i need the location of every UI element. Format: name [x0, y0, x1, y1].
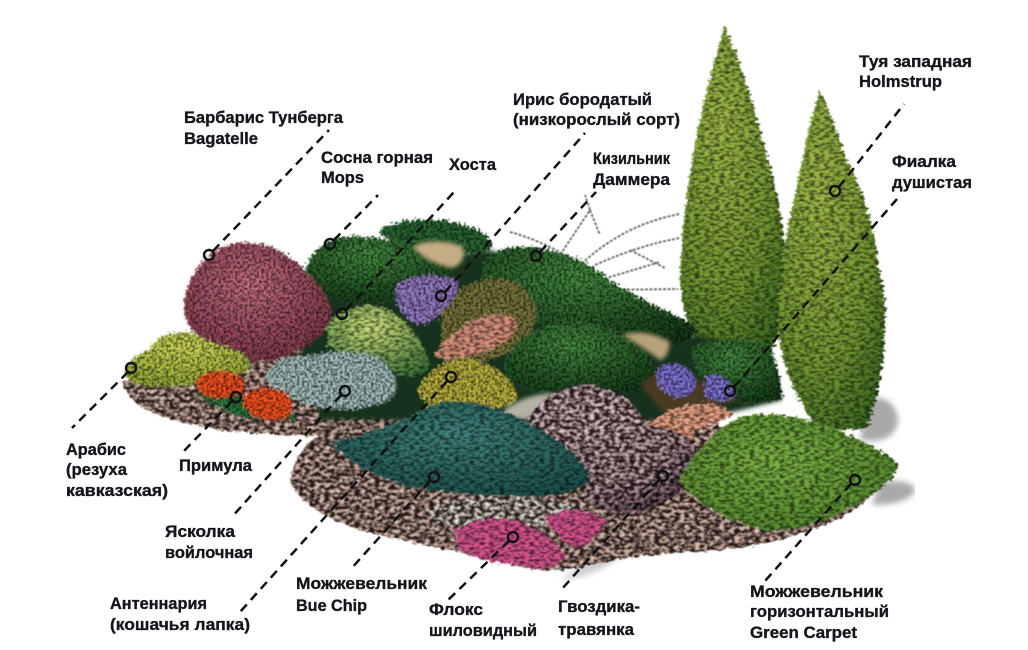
- plant: iris: [396, 276, 459, 324]
- label: arabis: кавказская): [66, 481, 168, 500]
- label: blue chip: Можжевельник: [296, 574, 427, 593]
- leader: phlox: [446, 532, 518, 602]
- label: iris: Ирис бородатый: [513, 90, 652, 109]
- label: blue chip: [296, 574, 427, 615]
- label: barberry: [184, 108, 344, 148]
- plant: mops pine: [306, 236, 452, 303]
- label: primula: Примула: [179, 456, 253, 475]
- label: cotoneaster: Кизильник: [593, 149, 670, 168]
- plant: hosta back dark: [378, 219, 492, 255]
- rock pink: [435, 314, 518, 360]
- leader: blue chip: [350, 472, 439, 570]
- label: cerastium: [165, 522, 253, 562]
- plant: green carpet juniper: [680, 414, 898, 530]
- label: cerastium: войлочная: [165, 543, 253, 562]
- leader: antennaria: [240, 372, 456, 612]
- label: carnation: травянка: [558, 620, 635, 639]
- label: pine: Сосна горная: [321, 148, 433, 167]
- rock tan back: [413, 241, 464, 268]
- label: phlox: [429, 600, 537, 640]
- leader: primula: [183, 392, 241, 452]
- label: barberry: Барбарис Тунберга: [184, 108, 344, 127]
- label: cotoneaster: Даммера: [593, 170, 671, 189]
- plant: cotoneaster branches: [510, 195, 680, 290]
- label: phlox: Флокс: [429, 600, 483, 619]
- backdrop: dark earth behind plants: [300, 250, 782, 420]
- label: pine: [321, 148, 433, 187]
- leader: barberry: [204, 130, 329, 260]
- label: iris: (низкорослый сорт): [513, 110, 680, 129]
- label: cerastium: Ясколка: [165, 522, 236, 541]
- leader: carnation: [561, 471, 668, 590]
- plant: violets: [640, 364, 740, 420]
- pale rocks around phlox: [425, 496, 590, 530]
- label: barberry: Bagatelle: [184, 129, 258, 148]
- plant: phlox: [455, 510, 606, 569]
- label: thuja: Holmstrup: [859, 72, 942, 91]
- plant: cerastium blue-grey: [266, 352, 397, 409]
- label: arabis: [66, 440, 168, 500]
- label: carnation: [558, 597, 640, 639]
- label: thuja: [859, 52, 972, 91]
- label: green carpet: Можжевельник: [750, 582, 883, 601]
- plant: dark back shrub: [692, 339, 782, 405]
- label: antennaria: (кошачья лапка): [110, 615, 250, 634]
- label: green carpet: [750, 582, 889, 642]
- leader: cotoneaster: [531, 192, 596, 261]
- label: violet: душистая: [892, 173, 972, 192]
- leader: hosta: [337, 192, 454, 319]
- leader: pine: [325, 195, 378, 249]
- plant: central green conifer: [505, 322, 656, 396]
- mulch bed: [122, 340, 880, 570]
- ground shadows: [560, 398, 915, 580]
- plant: primula: [195, 371, 298, 420]
- label: cotoneaster: [593, 149, 671, 189]
- label: thuja: Туя западная: [859, 52, 972, 71]
- label: arabis: (резуха: [66, 460, 128, 479]
- label: antennaria: Антеннария: [110, 594, 207, 613]
- label: carnation: Гвоздика-: [558, 597, 640, 616]
- plant: thuja left: [680, 25, 786, 352]
- leader: iris: [436, 133, 585, 301]
- rock pink lower: [647, 403, 732, 442]
- label: arabis: Арабис: [66, 440, 126, 459]
- plant: arabis: [125, 332, 251, 386]
- leader: arabis: [72, 363, 136, 428]
- leader: violet: [725, 199, 897, 396]
- rock tan right: [622, 333, 670, 360]
- label: blue chip: Bue Chip: [296, 596, 367, 615]
- label: green carpet: горизонтальный: [750, 602, 889, 621]
- slope grasses: [440, 279, 537, 363]
- label: antennaria: [110, 594, 250, 634]
- labels: [66, 52, 972, 642]
- label: hosta: Хоста: [449, 155, 497, 174]
- plant: blue chip juniper: [330, 401, 590, 497]
- rock grey: [498, 393, 552, 420]
- leader: thuja: [830, 104, 904, 196]
- label: violet: [892, 152, 972, 192]
- plant: cotoneaster: [482, 247, 696, 346]
- leader: green carpet: [765, 475, 860, 581]
- plant: barberry: [184, 242, 332, 362]
- label: green carpet: Green Carpet: [750, 623, 857, 642]
- illustration: garden rockery: [122, 25, 915, 580]
- label: iris: [513, 90, 680, 129]
- label: violet: Фиалка: [892, 152, 957, 171]
- label: phlox: шиловидный: [429, 621, 537, 640]
- plant: gypsophila mound: [528, 385, 703, 513]
- plant: antennaria yellow: [418, 358, 518, 408]
- leader lines and markers: [72, 104, 904, 612]
- plant: hosta: [326, 306, 430, 376]
- label: pine: Mops: [321, 168, 364, 187]
- leader: cerastium: [231, 386, 350, 518]
- plant: thuja right: [778, 88, 885, 430]
